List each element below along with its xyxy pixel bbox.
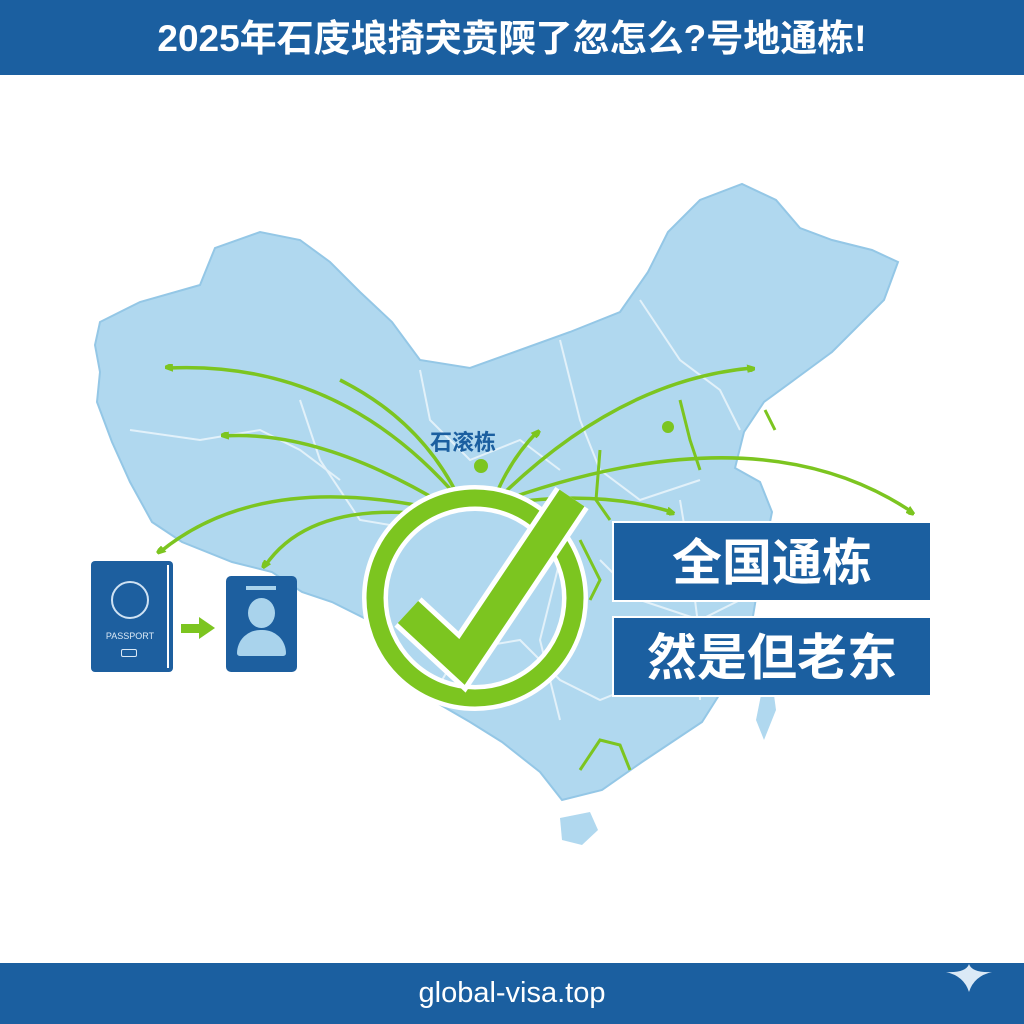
label: second line: 然是但老东 (647, 630, 897, 686)
icon: ID card (226, 576, 297, 672)
label: nationwide: 全国通栋 (672, 535, 872, 591)
china map shape (95, 184, 898, 845)
footer bar (0, 963, 1024, 1024)
city label: 石滚栋 (430, 430, 496, 455)
label: second line (612, 616, 932, 697)
icon: passport: PASSPORT (106, 631, 154, 641)
city dots (474, 459, 488, 473)
icon: passport (91, 561, 173, 672)
arrows radiating from city (160, 368, 912, 566)
check circle (375, 498, 575, 698)
icon: green arrow (181, 617, 215, 639)
title bar: 2025年石庋埌掎宊贲陾了忽怎么?号地通栋! (157, 18, 867, 59)
label: nationwide (612, 521, 932, 602)
title bar (0, 0, 1024, 75)
icon: sparkle (946, 964, 992, 992)
footer bar: global-visa.top (418, 977, 606, 1009)
